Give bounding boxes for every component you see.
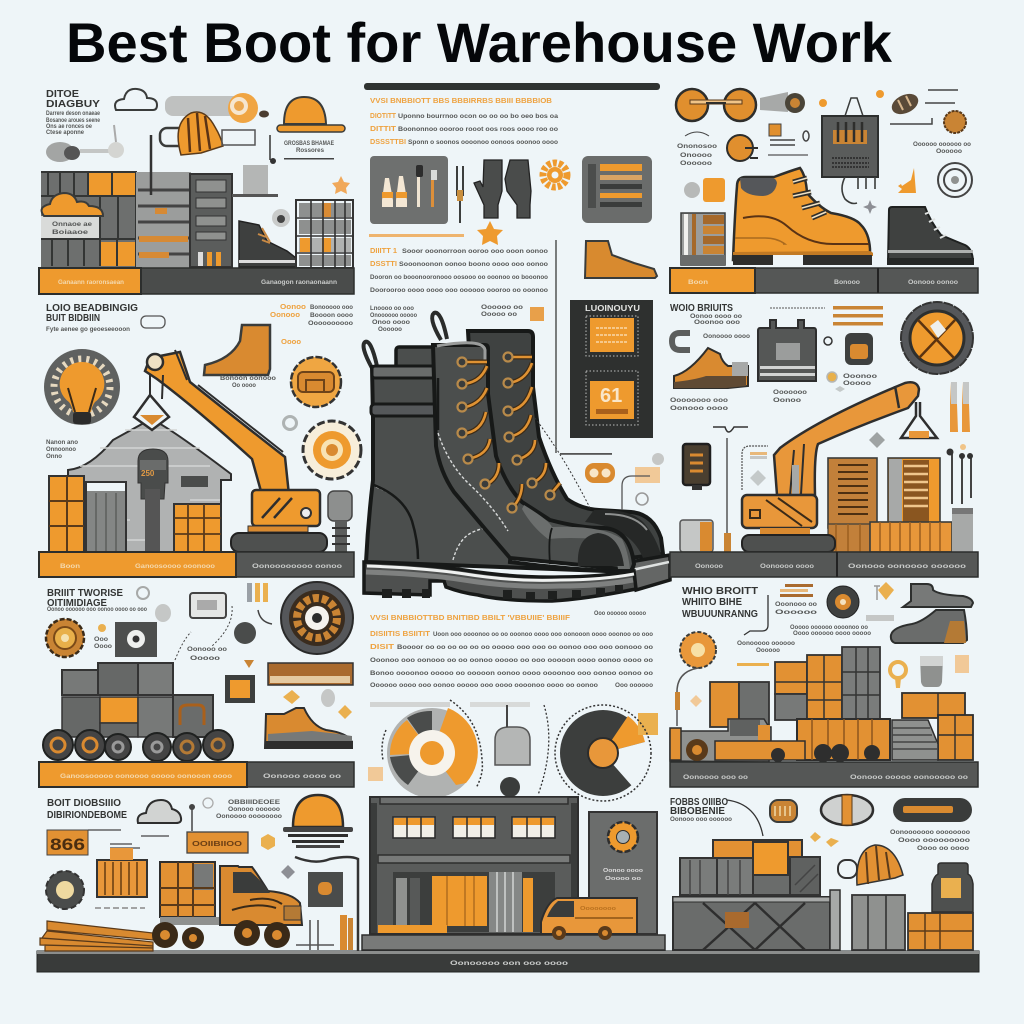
icon: dark boot [239,209,296,267]
icon: capsule and gear [889,90,966,133]
heading: top left: DITOE [46,89,79,100]
note: Oooooo [775,610,818,616]
building [362,797,665,950]
icon: large orange boot [733,168,873,265]
icon: ring [137,587,149,599]
heading: lower right: WHIO BROITT [682,586,758,597]
text: bottom right: Oooo oo oooo [917,846,969,852]
icon: orange pill [585,463,615,483]
heading: bottom right: Oonooo ooo oooooo [670,817,732,823]
right grid rack [296,200,353,268]
icon: orange van: Oooooooo [580,906,616,912]
tag: 866 [47,830,169,855]
icon: hard hat [838,845,903,885]
text: bottom right: Oonooooooo oooooooo [890,830,970,836]
heading: middle left: LOIO BEADBINGIG [46,303,138,314]
icon: grey machine [46,125,124,162]
icon: orange box [95,848,147,908]
icon: gear [46,871,84,909]
base bar: top right: Bonooo [834,280,860,286]
dark tower rack [190,174,278,267]
icon: truck [670,719,890,762]
icon: orange sun [228,93,269,123]
icon: grey block [243,165,268,195]
heading: middle right: Ooonoo ooo [694,320,740,326]
text: top right note: Oooooo oooooo oo [913,142,971,148]
text block: lower centre: DISIITIS BSIITIT [370,631,431,638]
leader line [555,240,557,453]
icon: orange gear [543,163,567,187]
gear panel: Oonoo oooo [603,868,643,874]
tag: 866: 866 [50,835,85,854]
text: shoe caption: Ooooo [843,381,871,387]
grey container [86,482,126,552]
icon: orange tray [225,663,353,719]
text block: centre lower: DIIITT 1 [370,248,397,255]
tag orange label: OOIIBIIOO [192,841,243,848]
icon: orange van [541,898,637,940]
heading: top left: Ons ae ronces oe [46,124,93,130]
heading: bottom left: BOIT DIOBSIIIO [47,798,121,809]
text: boot note: Boooon oooo [310,313,353,319]
icon: circuit box [822,98,878,204]
heading: middle right: Oonoooo oooo [703,334,750,340]
label: hat caption: Rossores [296,148,325,154]
text block: lower centre: DISIT [370,644,395,651]
heading: top left: Darrere deson onaeae [46,111,101,117]
text block: centre lower [370,248,548,294]
icon: dark pack [758,320,816,381]
text: boot note: Nanon ano [46,440,78,446]
icon: probe tool [457,166,463,223]
heading: middle left: BUIT BIDBIIN [46,313,100,324]
icon: capsule [893,798,972,822]
icon: orange goggles [676,89,756,121]
caption notes above boot: Onoo oooo [372,320,410,326]
base bar: top left [39,268,354,294]
icon: cloud outline bottom [138,800,181,823]
icon: gear sun: Ooo [94,637,108,643]
heading: lower right: WBUUUNRANNG [682,609,758,620]
base bar: middle right: Oonoooo oooo [760,564,814,570]
grey lockers [852,895,905,950]
icon: small dial [760,90,884,113]
text block: centre lower: Dooron oo booonooronooo oosooo oo ooonoo oo booonoo [370,275,548,281]
icon: dark square [115,622,157,657]
panel: central large boot [364,305,670,601]
heading: bottom left: DIBIRIONDEBOME [47,810,127,821]
card chip one [586,316,638,356]
base bar: bottom: Oonooooo oon ooo oooo [450,961,569,967]
text block: lower centre: Uoon ooo oooonoo oo oo ooonoo oooo ooo oonooon oooo ooonoo oo ooo [433,632,653,638]
icon: printer: Oonooo oo [187,647,227,653]
tag orange label [187,832,275,853]
heading: bottom left: Oonooo oooooo [228,807,280,813]
text: shoe caption: Ooonoo [843,374,877,380]
icon: hard hat bottom [283,795,353,848]
heading: lower left: BRIIIT TWORISE [47,588,123,599]
icon: cloud outline [115,89,157,110]
note [560,453,664,510]
label: shelf caption [52,222,93,236]
text: boot note: Bonooooo ooo [310,305,353,311]
text: boot note: Oooo [281,339,301,346]
icon: device [683,444,710,490]
icon: boot laces [458,352,560,512]
icon: orange tag [845,333,873,365]
note: Oooooo [756,648,780,654]
heading: bottom left: OBBIIIDEOEE [228,800,280,806]
text: top right note: Ononosoo [677,144,717,150]
text: boot note: Oooooooooo [308,321,353,327]
stacked containers [62,663,213,737]
caption notes above boot: Lnoooo oo ooo [370,306,414,312]
icon: orange gear disc [303,421,361,479]
stacked crates left [49,476,84,552]
icon: orange bowl [727,135,758,161]
icon: orange shoe [674,348,748,388]
caption notes above boot: Ooooo oo [481,312,517,318]
base bar: bottom [37,951,979,972]
icon: radio [932,863,973,912]
text: shoe caption: Oonooo oooo [670,406,728,412]
card heading: LUOINOUYU [585,304,640,313]
base bar: lower right: Oonoooo ooo oo [683,775,748,781]
base bar: lower left: Oonooo oooo oo [263,774,342,780]
icon: orange shoe [265,708,353,748]
front boot upper [366,343,634,572]
caption notes above boot [370,305,544,333]
top dark bar [364,83,660,90]
icon: orange bars [770,306,883,382]
text: boot note: Oo oooo [232,383,256,389]
warehouse shelves left [41,172,136,268]
heading: bottom right: FOBBS OIIIBO [670,797,728,808]
panel: bottom strip [37,795,979,972]
text block: centre upper: Boononnoo oooroo rooot oos roos oooo roo oo [398,127,558,133]
icon: boot tan [204,325,270,375]
decorative row [368,702,530,781]
note: Oonooooo oooooo [737,641,795,647]
caption notes above boot: Onoooooo ooooo [370,313,417,319]
panel: middle centre small icons [560,453,664,510]
icon: gear sun [46,619,112,657]
text block: centre upper: Sponn o soonos oooonoo oonoos ooonoo oooo [408,140,558,146]
tool set [946,382,973,504]
text: bottom right: Oooo ooooooooo [898,838,970,844]
text block: lower centre: Ooonoo ooo oonooo oo oo oonoo ooooo oo ooo ooooon oooo oonoo oooo oo [370,658,653,664]
text block: centre upper: DSSSTTBI [370,139,406,146]
small ladders [296,915,353,950]
caption notes above boot: Oooooo [378,327,402,333]
text: shoe caption: Oonoo [773,398,801,404]
icon: note strip [742,446,768,490]
icon: planks [40,921,153,951]
panel: lower left stack [39,582,354,787]
card chip two: 61 [600,385,622,407]
base bar: middle left: Oonoooooooo oonoo [252,564,342,570]
icon: grey shoe [903,584,973,607]
panel: lower centre text and charts [368,611,658,801]
steel table [673,890,840,950]
text block: lower centre: Ooo oooooo ooooo [594,611,646,617]
note [737,584,871,666]
icon: pull loops [364,313,447,368]
panel: lower right containers [670,582,978,787]
text block: centre lower: Sooonoonon oonoo boono oooo ooo oonoo [399,262,548,268]
text block: centre upper: DIOTITT [370,113,397,120]
dotted leader [535,418,591,510]
base bar: middle left [39,552,354,577]
stair shelves [136,135,191,268]
text block: lower centre: Ooo oooooo [615,683,653,689]
icons: small top [866,582,894,621]
text: boot note [46,304,353,460]
heading: lower centre: VVSI BNBBIOTTBD BNITIBD BBILT 'VBBUIIE' BBIIIF [370,615,571,622]
front boot sole [364,562,636,601]
icon: lamp and rings [890,655,969,688]
text: boot note: Onnoonoo [46,447,76,453]
decorative ring [284,416,296,430]
heading: bottom right [670,797,763,836]
heading: bottom left: Oonoooo oooooooo [216,814,282,820]
icon: gauge dial [901,302,973,374]
base bar: top left: Ganaogon raonaonaann [261,280,337,286]
base bar: middle left: Boon [60,564,80,570]
text block: centre lower: DSSTTI [370,261,397,268]
note: Ooonooo oo [775,602,817,608]
icon: wheels row [43,730,233,761]
icon: ring dial [938,163,972,197]
gear panel: Ooooo oo [605,876,641,882]
panel: top left warehouse [39,89,354,294]
heading: top left: Ctese aponne [46,130,85,136]
heading: top left [46,89,101,136]
label: shelf caption: Boiaaoe [52,230,89,236]
icon: printer: Ooooo [190,656,221,662]
icon: pole and ring [189,798,213,831]
icon: dark shoe [891,610,967,643]
text block: centre lower: Sooor ooonorroon ooroo ooo ooon oonoo [402,249,548,255]
icon: orange cloud [42,193,103,216]
warehouse house [68,419,231,552]
base bar: middle right [670,552,978,577]
heading: centre: VVSI BNBBIOTT BBS BBBIRRBS BBIII BBBBIOB [370,98,552,105]
text: top right note: Oooooo [936,149,962,155]
base bar: lower right: Oonooo ooooo oonooooo oo [850,775,968,781]
crates stacked [828,458,973,552]
base bar: lower left [39,762,354,787]
icon: small orange star [332,176,350,194]
text block: lower centre: Oooooo oooo ooo oonoo ooooo ooo oooo oooonoo oooo oo oonoo [370,683,598,689]
icon: bell [495,705,549,797]
heading: bottom right: BIBOBENIE [670,806,725,817]
text: top right note: Onoooo [680,153,712,159]
icon: orange shoe [585,241,657,278]
text: bottom right [810,830,970,852]
icon: dark tile and pole [281,857,358,951]
text: boot note: Oonoo [280,304,306,311]
label: hat caption [270,135,334,164]
text: shoe caption [670,374,877,412]
text: shoe caption: Oooooooo ooo [670,398,728,404]
chart: orange pie [382,700,482,798]
icon: right glove [505,160,531,218]
icon: dark boot [887,207,974,265]
icon: tall lamp [328,491,352,552]
heading: lower right: WHIITO BIHE [682,597,742,608]
gear panel [589,812,657,934]
icon: orange truck [152,862,302,949]
base bar: top right: Oonooo oonoo [908,280,958,286]
icon: orange square gear [684,178,725,202]
icon: light bulb dial [44,349,120,425]
heading: top left: DIAGBUY [46,99,100,110]
back boot [396,331,670,590]
icon: book crate [681,213,725,265]
orange boxes [908,913,973,950]
heading: middle right: WOIO BRIUITS [670,303,733,314]
panel: middle left crane and warehouse [39,303,361,577]
icon: dark blob and bars [234,583,272,668]
heading: lower left: OITIMIDIAGE [47,598,107,609]
icon: striped egg [821,795,873,825]
icon: orange star [477,221,503,245]
text block: lower centre: Boooor oo oo oo oo oo oo ooooo ooo ooo oo oonoo ooo ooo oonooo oo [397,645,653,651]
label: shelf caption: Onnaoe ae [52,222,93,228]
base bar: lower left: Ganoosooooo oonoooo ooooo oonooon oooo [60,774,232,780]
base bar: top left: Ganaann raoronsaean [58,280,124,286]
chart: record disk [555,705,658,801]
icon: left glove [474,160,502,218]
text block: centre upper: DITTIT [370,126,397,133]
heading: middle left: Fyte aenee go geoeseeooon [46,327,130,333]
icon: printer [155,593,232,662]
heading: middle left [46,303,138,333]
note: Oooo oooooo oooo ooooo [793,631,871,637]
text: boot note: Bonoon oonooo [220,376,276,382]
stepped crates right [892,693,973,760]
icon: gear [675,632,716,726]
text block: lower centre: Bonoo oooonoo ooooo oo ooooon oonoo oooo oooonoo ooo oonoo oonoo oo [370,671,653,677]
warehouse house: 250 [141,469,155,478]
note: Ooooo oooooo oooonoo oo [790,625,868,631]
heading: bottom left [47,798,282,821]
label: hat caption: GROSBAS BHAMAE [284,141,334,147]
base bar: lower right [670,762,978,787]
icon: striped helmet [160,96,255,155]
containers stack bottom right [680,840,820,895]
text: shoe caption: Ooooooo [773,390,807,396]
panel: middle right crane [670,302,978,577]
heading: middle right [670,303,750,340]
icon: orange star [898,168,916,193]
caption notes above boot: Oooooo oo [481,305,523,311]
heading: middle right: Oonoo oooo oo [690,314,742,320]
icon: big gear dial [281,582,353,654]
icon: orange pill [770,800,797,822]
icon: small orange tile [768,124,809,155]
panel: dark chip card [570,300,653,438]
divider: orange line [369,234,464,237]
text block: centre upper: Uponno bourrnoo ocon oo oo oo bo oeo bos oa [398,114,559,120]
heading: lower right [682,586,758,620]
text: boot note: Onno [46,454,62,460]
panel: legend box [582,156,652,223]
heading: lower left: Oonoo oooooo ooo oonoo oooo oo ooo [47,607,147,613]
base bar: top right [670,268,978,293]
text: top right note: Oooooo [680,161,712,167]
icon: grey star [863,200,877,214]
text: top right note [677,132,971,167]
icon: gear box [291,357,341,407]
icon: gear sun: Oooo [94,644,112,650]
containers stack [710,647,880,727]
text: boot note: Oonooo [270,312,300,319]
icon: grey stars [750,382,945,486]
panel: top centre text and tools [364,83,660,453]
title: Best Boot for Warehouse Work [66,11,893,74]
stacked crates right [174,504,221,552]
icon: clip [672,333,690,350]
base bar: middle right: Oonooo oonoooo oooooo [848,564,967,570]
crane excavator right [742,382,937,552]
icon: hard hat [277,97,345,132]
tag [141,316,165,328]
icon: canister [680,520,713,552]
panel: top right boots [670,89,978,293]
panel: tools box [370,156,448,224]
crane excavator [134,350,327,552]
heading: top left: Bosanoe aroues seene [46,118,101,124]
text block: centre lower: Doorooroo oooo oooo ooo oooooo oooroo oo ooonoo [370,288,548,294]
base bar: middle right: Oonooo [695,564,723,570]
text block: centre upper [370,113,559,146]
text block: lower centre [370,611,653,689]
heading: lower left [47,588,147,613]
base bar: middle left: Ganoosoooo ooonooo [135,564,215,570]
icon: y pole [713,427,748,552]
base bar: top right: Boon [688,280,708,286]
